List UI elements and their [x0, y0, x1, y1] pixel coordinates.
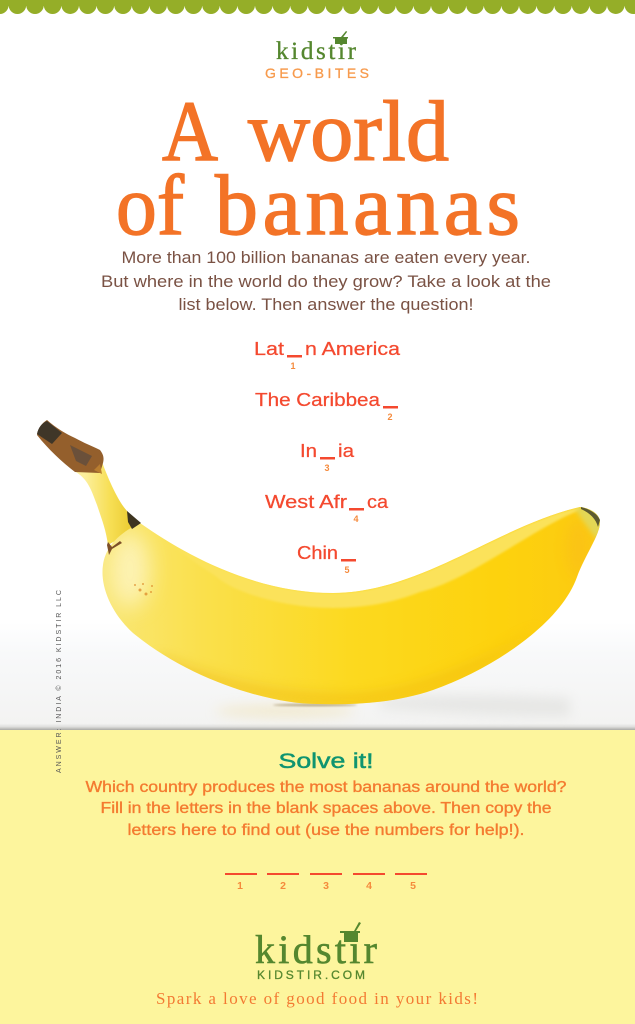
- word: The Caribbean: [255, 389, 398, 422]
- website: KIDSTIR.COM: [257, 968, 365, 982]
- word: Latin America: n America: [305, 338, 401, 359]
- icon: pot: [340, 922, 361, 942]
- fill-in word list: [254, 338, 401, 575]
- banana tip: [581, 507, 600, 527]
- title: [116, 83, 520, 253]
- word: Latin America: Lat: [254, 338, 284, 359]
- banana left highlight: [110, 532, 150, 608]
- word: India: In: [300, 440, 317, 461]
- word: West Africa: [265, 491, 389, 524]
- copyright vertical text: ANSWER: INDIA © 2016 KIDSTIR LLC: [55, 590, 63, 773]
- intro text: list below. Then answer the question!: [178, 295, 474, 314]
- word: West Africa: West Afr: [265, 491, 347, 512]
- top kidstir logo: kidstir: [276, 38, 357, 65]
- answer blanks: 3: [323, 880, 329, 892]
- banana lower shading: [162, 650, 512, 704]
- answer blanks: 5: [410, 880, 416, 892]
- answer blanks: 1: [237, 880, 243, 892]
- word: India: ia: [338, 440, 355, 461]
- banana tip green: [575, 507, 600, 540]
- solve instructions: Which country produces the most bananas around the world?: [86, 779, 567, 796]
- word: China: Chin: [297, 542, 338, 563]
- solve instructions: [86, 779, 567, 839]
- word: The Caribbean: The Caribbea: [255, 389, 381, 410]
- word: West Africa: 4: [353, 514, 359, 524]
- icon: pot: [333, 31, 348, 44]
- banana stem end: [37, 420, 104, 473]
- banana dark spots: [127, 511, 141, 529]
- answer blanks: 2: [280, 880, 286, 892]
- floor background: [0, 622, 635, 730]
- word: India: 3: [324, 463, 330, 473]
- answer blanks: [225, 873, 427, 892]
- banana stem: [74, 462, 142, 545]
- word: The Caribbean: 2: [387, 412, 393, 422]
- solve it heading: Solve it!: [278, 750, 374, 773]
- title: world: [248, 83, 449, 179]
- title: of: [116, 157, 184, 253]
- word: India: [300, 440, 355, 473]
- solve instructions: letters here to find out (use the numbers for help!).: [128, 822, 524, 839]
- tagline: Spark a love of good food in your kids!: [156, 989, 478, 1008]
- title: bananas: [215, 157, 520, 253]
- word: Latin America: [254, 338, 401, 371]
- word: China: 5: [344, 565, 350, 575]
- word: Latin America: 1: [290, 361, 296, 371]
- intro text: More than 100 billion bananas are eaten every year.: [122, 248, 530, 267]
- banana photo: [37, 420, 610, 717]
- solve instructions: Fill in the letters in the blank spaces above. Then copy the: [100, 800, 552, 817]
- geo-bites label: GEO-BITES: [265, 65, 369, 81]
- yellow solve panel: [0, 730, 635, 1024]
- scalloped green top border: [0, 0, 635, 14]
- banana body: [95, 500, 610, 710]
- banana shadow: [215, 695, 570, 717]
- word: West Africa: ca: [367, 491, 389, 512]
- title: A: [162, 83, 218, 179]
- word: China: [297, 542, 356, 575]
- intro text: [101, 248, 551, 314]
- banana top ridge highlight: [140, 507, 580, 608]
- bottom kidstir logo: kidstir: [255, 927, 377, 972]
- intro text: But where in the world do they grow? Take a look at the: [101, 272, 551, 291]
- banana right warm tone: [578, 548, 591, 574]
- answer blanks: 4: [366, 880, 372, 892]
